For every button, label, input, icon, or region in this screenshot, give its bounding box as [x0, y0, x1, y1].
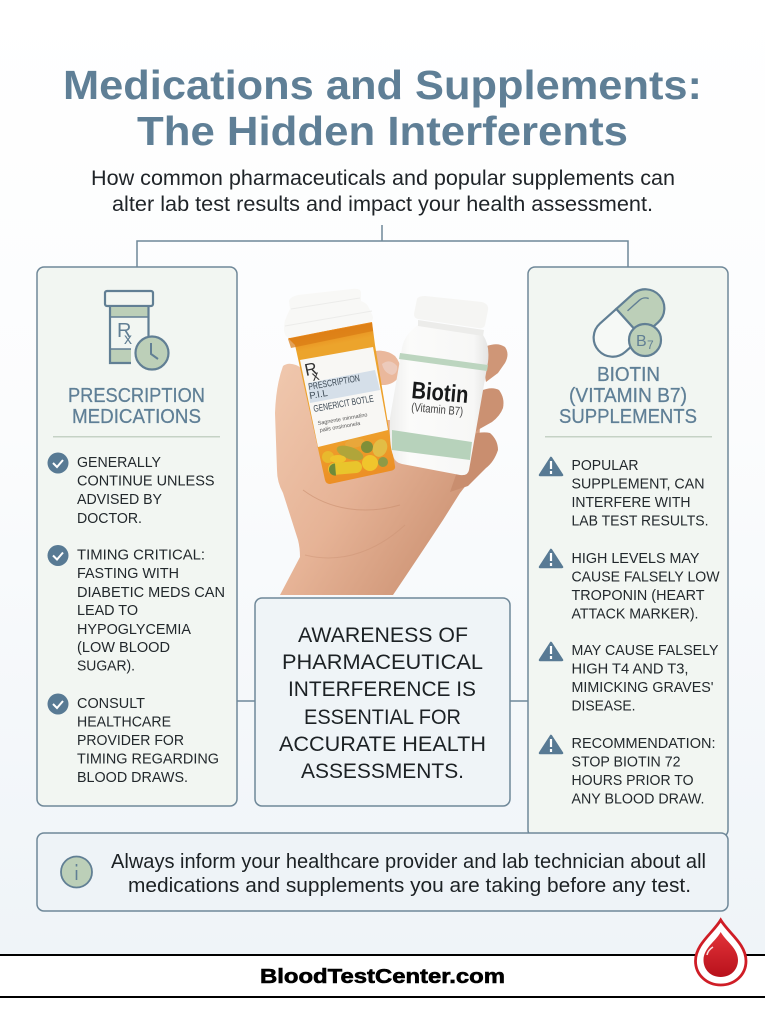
list item: generally continue: ADVISED BY: [77, 491, 162, 508]
subtitle: How common pharmaceuticals and popular supplements can: [91, 167, 675, 190]
pill bottle: PRESCRIPTION: [308, 373, 361, 393]
icon: capsule with B7: B: [636, 333, 647, 350]
list item: timing critical: TIMING CRITICAL:: [77, 546, 205, 564]
heading: biotin supplements: SUPPLEMENTS: [559, 406, 697, 428]
biotin bottle: (Vitamin B7): [411, 400, 464, 419]
pill bottle: R: [303, 359, 319, 380]
pill bottle: palis onsimonela: [319, 421, 362, 434]
list item: timing critical: (LOW BLOOD: [77, 639, 170, 656]
list item: timing critical: FASTING WITH: [77, 565, 179, 582]
list item: popular supplement: LAB TEST RESULTS.: [572, 512, 708, 530]
list item: generally continue: CONTINUE UNLESS: [77, 472, 214, 490]
list item: consult provider: [48, 694, 219, 786]
list item: timing critical: HYPOGLYCEMIA: [77, 621, 191, 638]
icon: info: [61, 856, 92, 888]
list item: timing critical: [48, 545, 225, 674]
title: Medications and Supplements:: [63, 62, 702, 108]
list item: troponin: ATTACK MARKER).: [572, 606, 698, 622]
lower finger: [450, 432, 498, 492]
list item: timing critical: DIABETIC MEDS CAN: [77, 584, 225, 601]
list item: troponin: TROPONIN (HEART: [572, 587, 704, 604]
icon: prescription bottle with clock: x: [124, 331, 132, 348]
heading: prescription medications: PRESCRIPTION: [68, 385, 205, 407]
list item: recommendation: STOP BIOTIN 72: [572, 754, 680, 770]
callout: awareness box: ESSENTIAL FOR: [304, 706, 461, 729]
list item: recommendation: [540, 735, 716, 808]
list item: popular supplement: INTERFERE WITH: [572, 494, 690, 511]
heading: biotin supplements: (VITAMIN B7): [569, 385, 687, 407]
list item: T4 and T3: MAY CAUSE FALSELY: [572, 642, 718, 659]
panel: biotin supplements: [528, 267, 728, 837]
heading: biotin supplements: [559, 364, 697, 428]
upper finger: [480, 344, 508, 382]
icon: capsule with B7: 7: [647, 338, 654, 352]
list item: popular supplement: POPULAR: [572, 457, 639, 474]
middle finger: [476, 388, 504, 431]
title: [63, 62, 702, 154]
callout: inform your provider: [37, 833, 728, 911]
heading: prescription medications: [68, 385, 205, 428]
list item: recommendation: HOURS PRIOR TO: [572, 772, 694, 789]
pill bottle: x: [310, 367, 320, 384]
list item: popular supplement: [540, 457, 708, 530]
pills: [322, 437, 390, 476]
list item: timing critical: SUGAR).: [77, 658, 135, 674]
pill bottle: [284, 289, 395, 484]
list item: T4 and T3: MIMICKING GRAVES': [572, 679, 714, 696]
callout: awareness box: INTERFERENCE IS: [288, 678, 476, 701]
list item: consult provider: CONSULT: [77, 695, 145, 712]
callout: awareness box: PHARMACEUTICAL: [282, 651, 483, 674]
list item: T4 and T3: DISEASE.: [572, 698, 636, 714]
list item: consult provider: BLOOD DRAWS.: [77, 769, 188, 786]
list item: consult provider: TIMING REGARDING: [77, 750, 219, 768]
index finger: [370, 351, 400, 385]
icon: prescription bottle with clock: R: [117, 320, 131, 342]
pill bottle: P.I.L: [309, 388, 329, 402]
pill bottle: Sagnente minmatino: [317, 412, 368, 427]
connector lines: [137, 225, 628, 701]
callout: inform your provider: medications and supplements you are taking before any test.: [128, 875, 691, 897]
list item: recommendation: ANY BLOOD DRAW.: [572, 790, 704, 808]
callout: awareness box: AWARENESS OF: [298, 624, 468, 647]
list item: timing critical: LEAD TO: [77, 602, 138, 619]
subtitle: [91, 167, 675, 216]
icon: capsule with B7: [586, 281, 672, 365]
list item: troponin: [540, 550, 720, 622]
list item: popular supplement: SUPPLEMENT, CAN: [572, 476, 704, 492]
hand: [275, 344, 508, 595]
biotin bottle: [390, 296, 488, 475]
list item: troponin: CAUSE FALSELY LOW: [572, 568, 720, 586]
heading: biotin supplements: BIOTIN: [597, 364, 660, 386]
footer: BloodTestCenter.com: [260, 966, 505, 988]
icon: blood drop logo: [696, 920, 746, 985]
title: The Hidden Interferents: [137, 108, 628, 154]
icon: prescription bottle with clock: [105, 291, 168, 370]
biotin bottle: Biotin: [410, 377, 470, 409]
list item: T4 and T3: HIGH T4 AND T3,: [572, 660, 688, 678]
list item: T4 and T3: [540, 642, 718, 714]
heading: prescription medications: MEDICATIONS: [72, 406, 201, 428]
callout: awareness box: ASSESSMENTS.: [301, 760, 464, 783]
subtitle: alter lab test results and impact your health assessment.: [112, 193, 653, 216]
list item: generally continue: DOCTOR.: [77, 510, 142, 527]
list item: consult provider: PROVIDER FOR: [77, 732, 184, 749]
callout: awareness box: ACCURATE HEALTH: [279, 733, 486, 756]
photo: hand holding two bottles: [275, 289, 508, 595]
list item: troponin: HIGH LEVELS MAY: [572, 550, 700, 567]
list item: recommendation: RECOMMENDATION:: [572, 735, 716, 752]
pill bottle: GENERICIT BOTLE: [313, 394, 375, 415]
list item: generally continue: [48, 452, 214, 527]
panel: prescription medications: [37, 267, 237, 806]
callout: inform your provider: Always inform your healthcare provider and lab technician about all: [111, 851, 706, 873]
callout: awareness box: [255, 598, 510, 806]
list item: consult provider: HEALTHCARE: [77, 714, 171, 730]
list item: generally continue: GENERALLY: [77, 454, 161, 471]
